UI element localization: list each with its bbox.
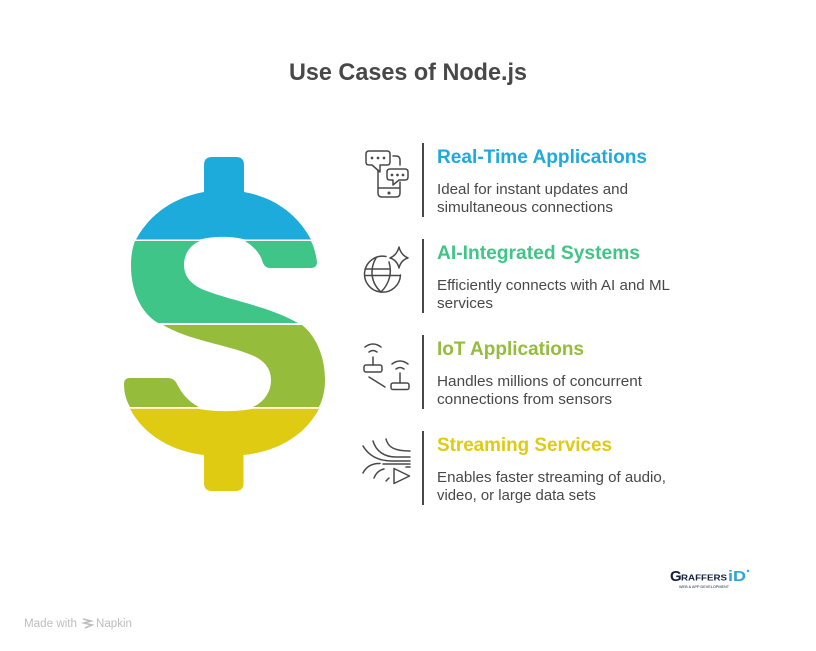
footer: Made with Napkin — [24, 618, 132, 630]
icon: wireless routers — [364, 344, 409, 390]
footer: Made with Napkin: Napkin — [96, 618, 132, 630]
logo: Graffers iD: iD — [728, 568, 746, 585]
description — [437, 182, 628, 216]
icon: chat bubbles and phone — [366, 151, 408, 197]
description — [437, 374, 642, 408]
divider — [422, 431, 424, 505]
description: simultaneous connections — [437, 200, 613, 216]
divider — [422, 239, 424, 313]
description — [437, 470, 666, 504]
description — [437, 278, 670, 312]
description: connections from sensors — [437, 392, 612, 408]
description: Ideal for instant updates and — [437, 182, 628, 198]
logo: Graffers iD: RAFFERS — [681, 572, 727, 582]
dollar segment: green — [131, 241, 317, 323]
row: AI-Integrated Systems — [365, 239, 670, 313]
row: Real-Time Applications — [366, 143, 647, 217]
description: services — [437, 296, 493, 312]
description: video, or large data sets — [437, 488, 596, 504]
icon: globe with sparkle — [365, 247, 408, 292]
row: Streaming Services — [363, 431, 666, 505]
heading: Real-Time Applications — [437, 147, 647, 168]
description: Enables faster streaming of audio, — [437, 470, 666, 486]
title: Use Cases of Node.js — [289, 59, 527, 86]
description: Handles millions of concurrent — [437, 374, 642, 390]
logo: Graffers iD — [670, 568, 749, 589]
icon: streaming flow with play button — [363, 439, 410, 484]
row: IoT Applications — [364, 335, 642, 409]
heading: IoT Applications — [437, 339, 584, 360]
dollar segment: blue — [136, 157, 311, 240]
footer: Made with Napkin: Made with — [24, 618, 77, 630]
icon: Napkin mark — [83, 619, 92, 628]
divider — [422, 143, 424, 217]
heading: AI-Integrated Systems — [437, 243, 640, 264]
heading: Streaming Services — [437, 435, 612, 456]
logo: Graffers iD: G — [670, 568, 682, 585]
description: Efficiently connects with AI and ML — [437, 278, 670, 294]
dollar segment: yellow — [130, 409, 319, 491]
divider — [422, 335, 424, 409]
logo: Graffers iD: WEB & APP DEVELOPMENT — [679, 584, 730, 589]
dollar segment: olive — [124, 325, 325, 407]
dollar sign chart — [124, 157, 325, 491]
